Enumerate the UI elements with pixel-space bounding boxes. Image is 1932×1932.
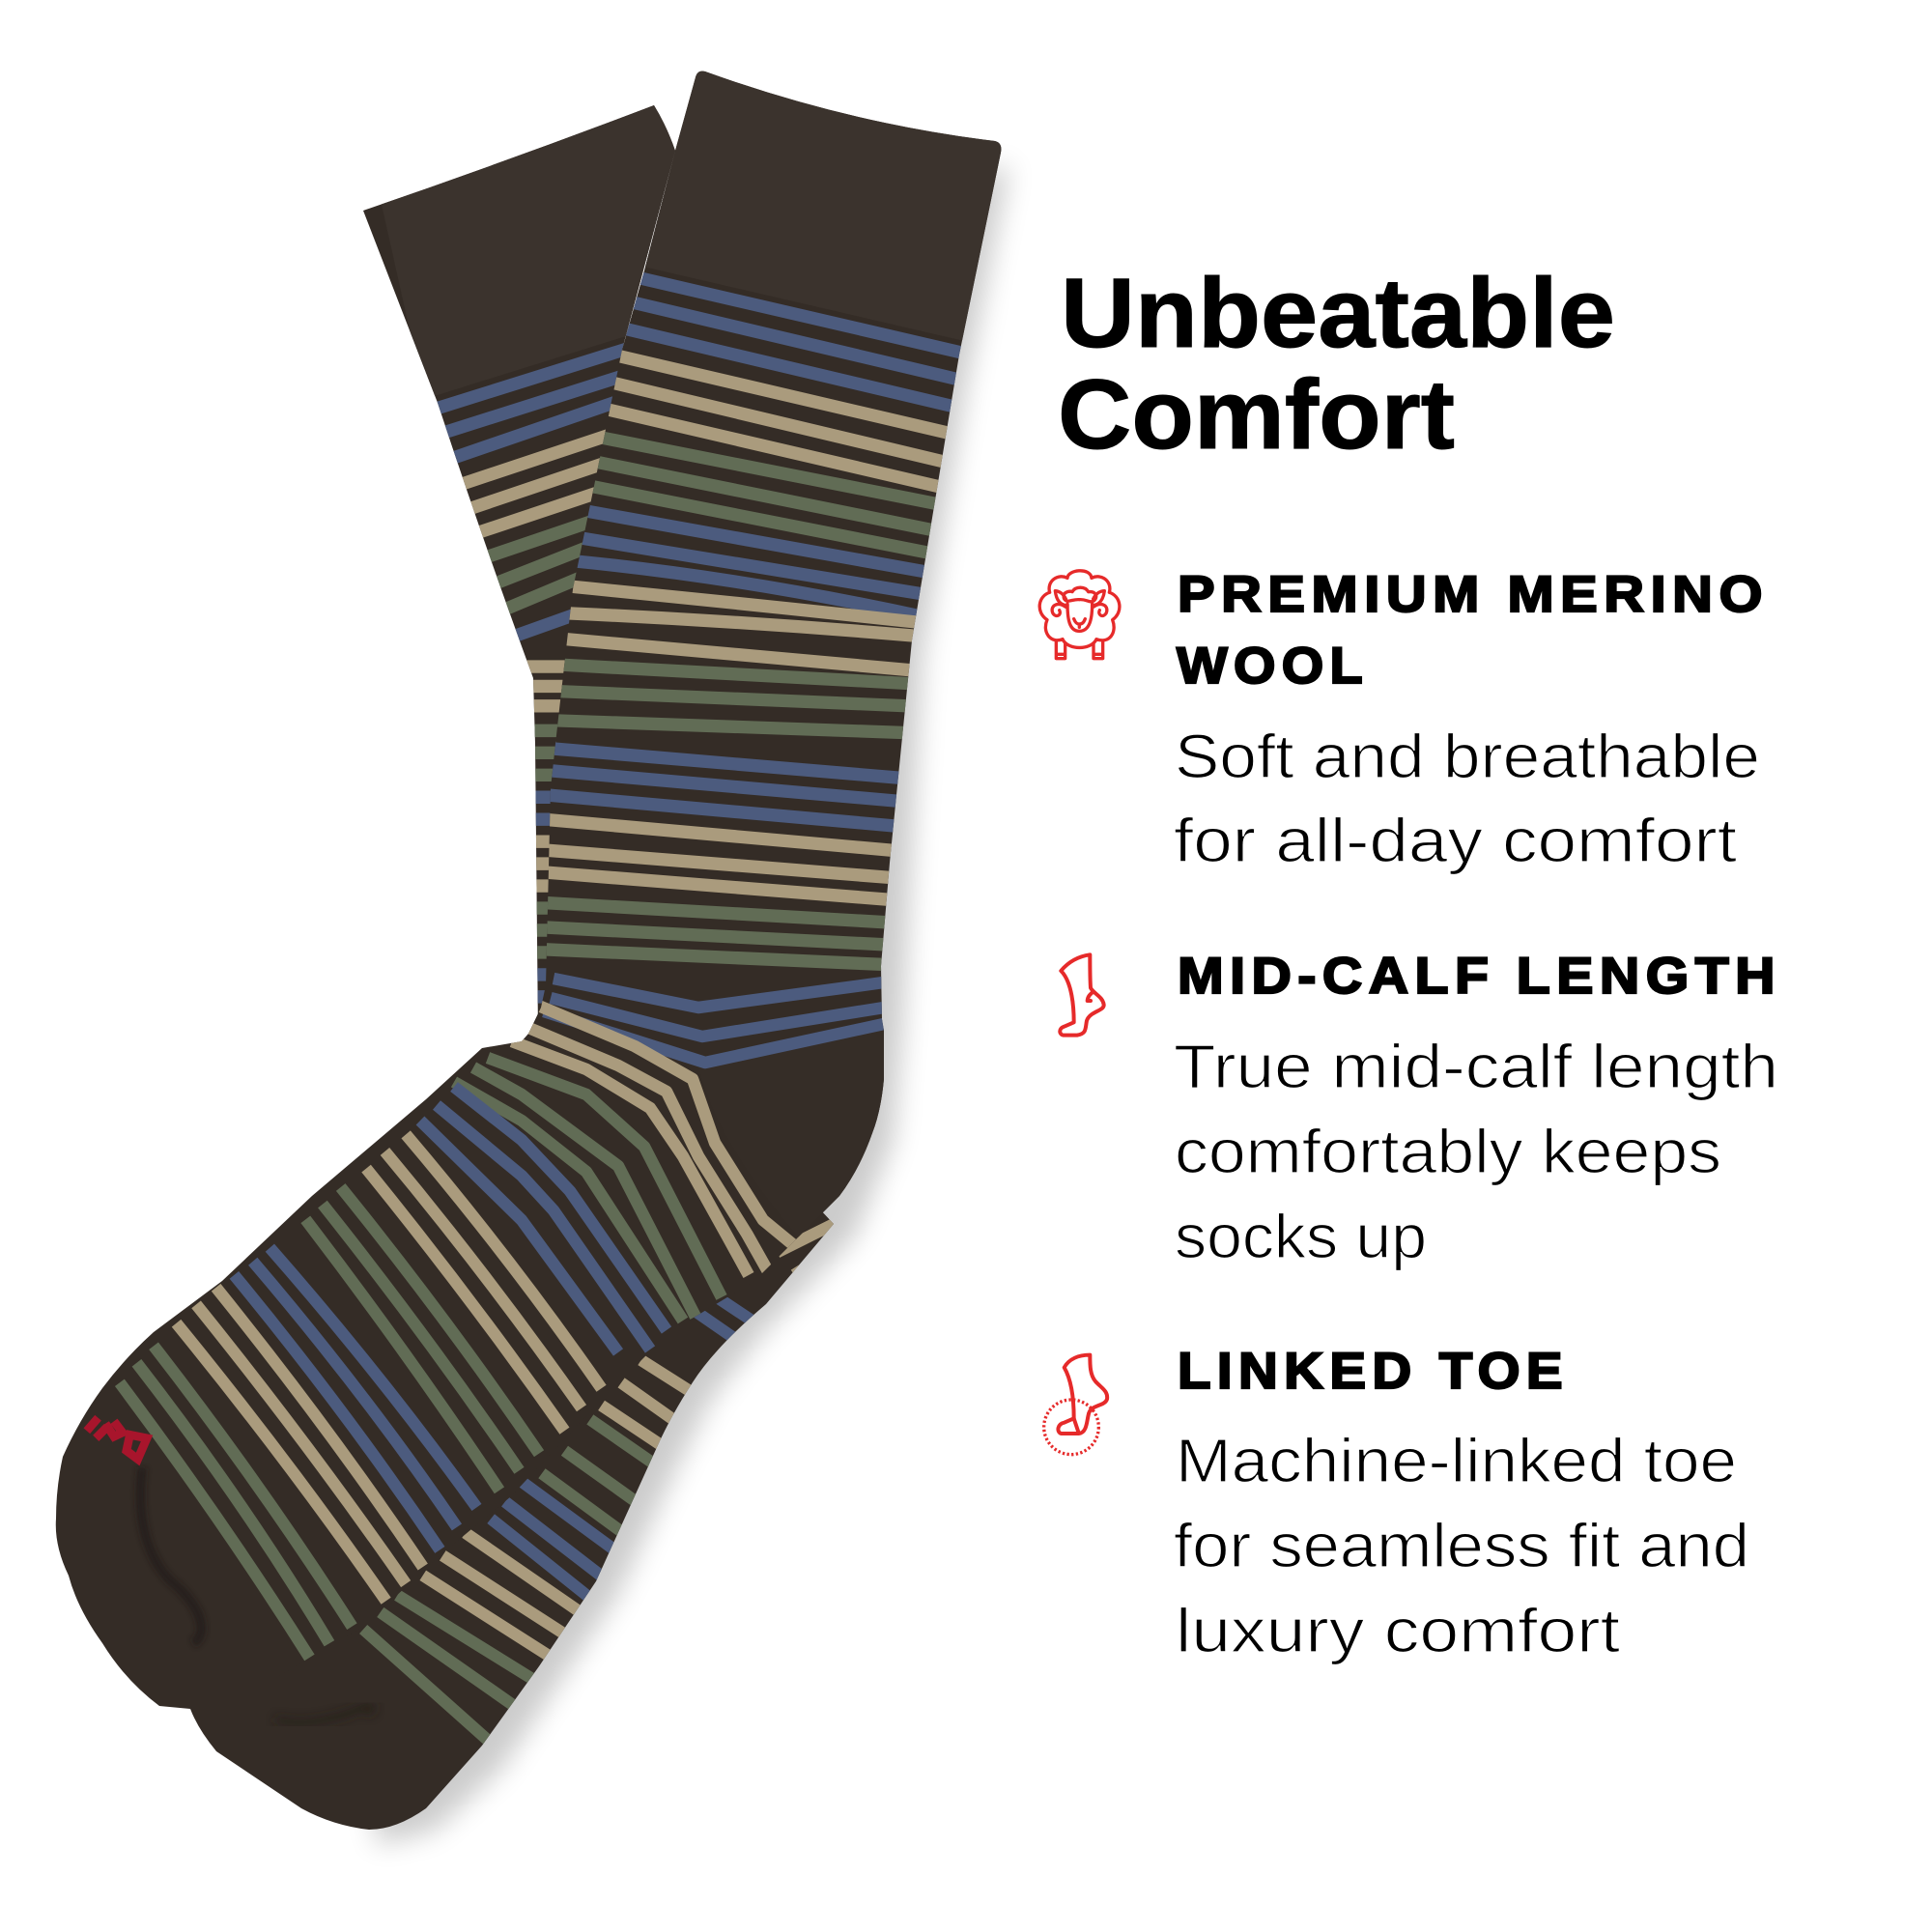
- heel patch: [798, 1028, 884, 1236]
- red logo stitching: [87, 1418, 147, 1460]
- front leg lower stripes: [529, 747, 924, 966]
- sock drop shadow: [367, 164, 1009, 1845]
- title: Unbeatable: [1061, 258, 1615, 368]
- feature: premium merino wool: PREMIUM MERINO: [1178, 566, 1769, 623]
- feature: mid-calf length: comfortably keeps: [1175, 1117, 1721, 1186]
- back cuff: [382, 105, 675, 396]
- feature: mid-calf length: socks up: [1175, 1202, 1427, 1271]
- back sock leg: [357, 97, 686, 1043]
- icon: linked toe: [1044, 1355, 1107, 1455]
- feature: linked toe: [1174, 1343, 1749, 1665]
- feature: linked toe: for seamless fit and: [1174, 1511, 1749, 1580]
- feature: linked toe: LINKED TOE: [1178, 1343, 1569, 1400]
- sock pair photo: [39, 58, 1014, 1845]
- back foot stripes: [363, 1224, 839, 1746]
- feature: premium merino wool: Soft and breathable: [1175, 722, 1760, 791]
- feature: premium merino wool: [1174, 566, 1769, 875]
- feature: premium merino wool: for all-day comfort: [1174, 806, 1737, 875]
- feature: linked toe: luxury comfort: [1176, 1596, 1620, 1665]
- icon: sheep: [1039, 571, 1120, 659]
- feature: linked toe: Machine-linked toe: [1176, 1426, 1737, 1495]
- front cuff: [645, 71, 1001, 340]
- back sock foot: [159, 1212, 834, 1830]
- feature: mid-calf length: True mid-calf length: [1174, 1032, 1778, 1101]
- back toe crease: [329, 1704, 372, 1718]
- front leg upper stripes: [538, 275, 977, 733]
- back leg stripes: [437, 343, 624, 641]
- feature: mid-calf length: [1174, 948, 1781, 1271]
- feature: premium merino wool: WOOL: [1177, 638, 1369, 695]
- heel chevron stripes: [420, 979, 884, 1352]
- feature: mid-calf length: MID-CALF LENGTH: [1178, 948, 1781, 1005]
- front sock: [39, 58, 1014, 1719]
- foot stripes: [120, 1134, 602, 1658]
- icon: mid-calf sock: [1060, 954, 1104, 1036]
- back leg lower strip stripes: [526, 660, 565, 1004]
- title: [1058, 258, 1615, 469]
- title: Comfort: [1058, 359, 1455, 469]
- toe crease: [140, 1467, 201, 1643]
